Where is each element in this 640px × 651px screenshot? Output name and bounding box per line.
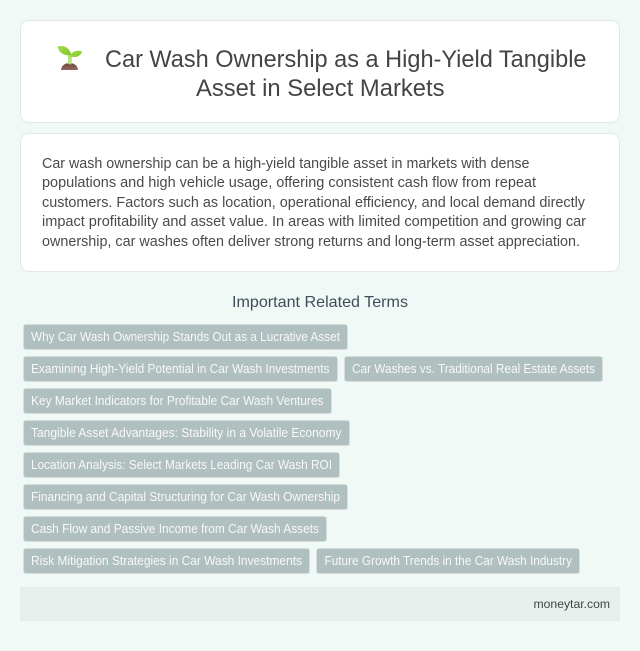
panel: summary paragraph: Car wash ownership can be a high-yield tangible asset in markets with dense (42, 156, 530, 172)
heading: important related terms: Important Related Terms (232, 294, 408, 311)
tag (344, 356, 602, 382)
tag (24, 484, 348, 510)
tag: Location Analysis: Select Markets Leading Car Wash ROI (31, 458, 332, 472)
tag (24, 356, 338, 382)
tag: Tangible Asset Advantages: Stability in a Volatile Economy (31, 426, 342, 440)
footer: moneytar.com (534, 597, 610, 611)
tag: Car Washes vs. Traditional Real Estate Assets (352, 362, 595, 376)
panel: title card (20, 20, 620, 122)
footer (20, 587, 620, 621)
panel: summary paragraph: ownership, car washes often deliver strong returns and long-term asset appreciation. (42, 234, 580, 250)
tag (24, 548, 310, 574)
panel: summary paragraph (20, 134, 620, 272)
panel: summary paragraph: populations and high vehicle usage, offering consistent cash flow from repeat (42, 175, 536, 191)
panel: related term tags (24, 324, 602, 574)
panel: summary paragraph: impact profitability and asset value. In areas with limited competition and growing car (42, 214, 586, 230)
tag: Financing and Capital Structuring for Car Wash Ownership (31, 490, 340, 504)
icon: sprout (58, 46, 82, 70)
tag: Why Car Wash Ownership Stands Out as a Lucrative Asset (31, 330, 340, 344)
tag (24, 388, 332, 414)
tag: Future Growth Trends in the Car Wash Industry (324, 554, 573, 568)
title line 1: Car Wash Ownership as a High-Yield Tangible (105, 46, 586, 73)
tag (24, 452, 340, 478)
tag: Risk Mitigation Strategies in Car Wash Investments (31, 554, 302, 568)
title line 2: Asset in Select Markets (196, 75, 444, 102)
tag: Examining High-Yield Potential in Car Wash Investments (31, 362, 330, 376)
tag: Cash Flow and Passive Income from Car Wash Assets (31, 522, 319, 536)
tag (316, 548, 580, 574)
tag (24, 516, 326, 542)
tag (24, 324, 348, 350)
tag: Key Market Indicators for Profitable Car Wash Ventures (31, 394, 324, 408)
tag (24, 420, 350, 446)
panel: summary paragraph: customers. Factors such as location, operational efficiency, and local demand directly (42, 195, 586, 211)
